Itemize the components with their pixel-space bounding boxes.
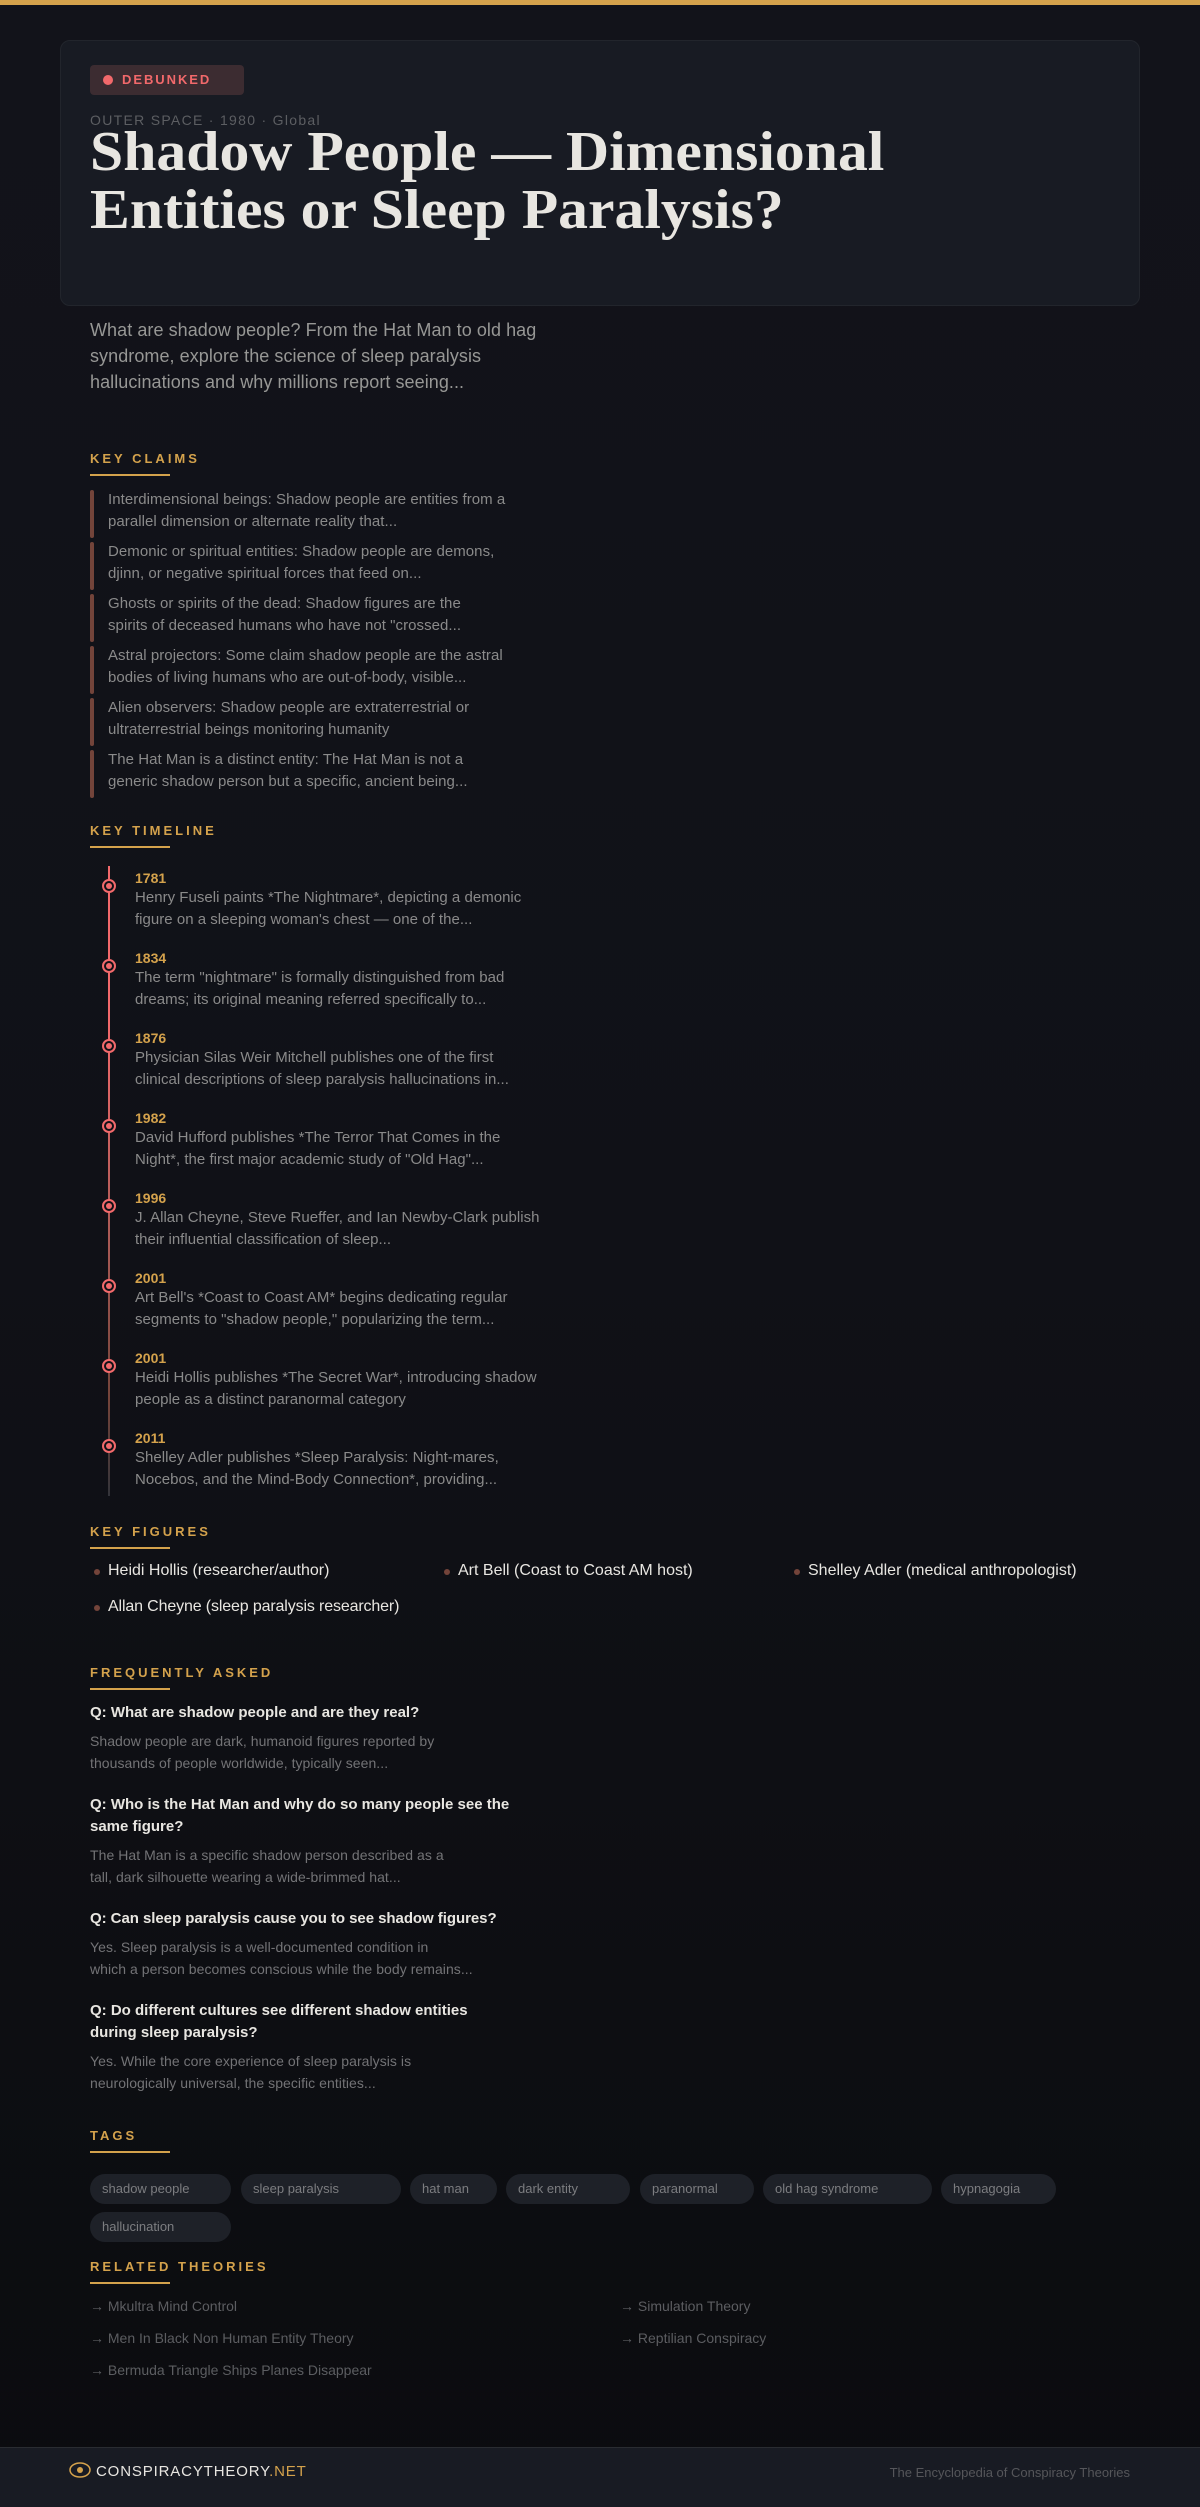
heading: key timeline: KEY TIMELINE: [90, 823, 217, 838]
event 2011: Shelley Adler publishes *Sleep Paralysis: Night-mares,: [135, 1449, 499, 1466]
event 1834: [102, 950, 504, 1008]
tag: shadow people: [102, 2181, 189, 2196]
timeline spine: [108, 866, 110, 1496]
claim 5: [90, 698, 469, 746]
status badge: debunked: [90, 65, 244, 95]
tag: [90, 2212, 231, 2242]
event 2001 Coast to Coast: segments to "shadow people," popularizing the term...: [135, 1311, 494, 1328]
claim 1: [90, 490, 506, 538]
faq 1: thousands of people worldwide, typically seen...: [90, 1755, 388, 1771]
faq 4: Q: Do different cultures see different shadow entities: [90, 2002, 468, 2019]
event 1781: [102, 870, 521, 928]
faq 2: The Hat Man is a specific shadow person described as a: [90, 1847, 444, 1863]
claim 4: Astral projectors: Some claim shadow people are the astral: [108, 647, 503, 664]
panel: header card: [60, 40, 1140, 306]
title: [90, 121, 884, 241]
claim 3: Ghosts or spirits of the dead: Shadow figures are the: [108, 595, 461, 612]
meta line: OUTER SPACE · 1980 · Global: [90, 112, 321, 128]
figure: Allan Cheyne: Allan Cheyne (sleep paralysis researcher): [108, 1598, 399, 1615]
event 1982: David Hufford publishes *The Terror That Comes in the: [135, 1129, 500, 1146]
event 1781: figure on a sleeping woman's chest — one of the...: [135, 911, 472, 928]
claim 6: generic shadow person but a specific, ancient being...: [108, 773, 468, 790]
panel: timeline: 2001: [135, 1270, 166, 1286]
tag: [410, 2174, 497, 2204]
footer tagline: The Encyclopedia of Conspiracy Theories: [890, 2465, 1130, 2480]
claim 6: The Hat Man is a distinct entity: The Hat Man is not a: [108, 751, 463, 768]
tag: sleep paralysis: [253, 2181, 339, 2196]
faq 3: Yes. Sleep paralysis is a well-documented condition in: [90, 1939, 428, 1955]
claim 5: ultraterrestrial beings monitoring humanity: [108, 721, 389, 738]
panel: tags: [90, 2174, 1056, 2242]
claim 1: parallel dimension or alternate reality that...: [108, 513, 397, 530]
faq 4: Yes. While the core experience of sleep paralysis is: [90, 2053, 411, 2069]
claim 6: [90, 750, 468, 798]
panel: key figures: [94, 1562, 1077, 1615]
event 1982: Night*, the first major academic study of "Old Hag"...: [135, 1151, 484, 1168]
event 1876: Physician Silas Weir Mitchell publishes one of the first: [135, 1049, 494, 1066]
summary text: hallucinations and why millions report seeing...: [90, 372, 464, 392]
faq 1: [90, 1704, 434, 1771]
panel: faq: [90, 1704, 509, 2091]
tag: [241, 2174, 401, 2204]
title: Shadow People — Dimensional: [90, 121, 884, 183]
tag: [763, 2174, 932, 2204]
event 1834: The term "nightmare" is formally distinguished from bad: [135, 969, 504, 986]
event 2001 Coast to Coast: [102, 1270, 508, 1328]
panel: timeline: 1834: [135, 950, 166, 966]
faq 2: tall, dark silhouette wearing a wide-brimmed hat...: [90, 1869, 401, 1885]
claim 1: Interdimensional beings: Shadow people are entities from a: [108, 491, 505, 508]
heading: tags: TAGS: [90, 2128, 137, 2143]
figure: Shelley Adler: Shelley Adler (medical anthropologist): [808, 1562, 1077, 1579]
summary text: [90, 320, 536, 392]
heading: frequently asked: FREQUENTLY ASKED: [90, 1665, 273, 1680]
faq 3: [90, 1910, 497, 1977]
tag: [941, 2174, 1056, 2204]
event 1834: dreams; its original meaning referred specifically to...: [135, 991, 486, 1008]
panel: timeline: [102, 866, 539, 1496]
panel: timeline: 2011: [135, 1430, 165, 1446]
tag: [90, 2174, 231, 2204]
tag: hypnagogia: [953, 2181, 1020, 2196]
faq 3: which a person becomes conscious while the body remains...: [90, 1961, 473, 1977]
faq 3: Q: Can sleep paralysis cause you to see shadow figures?: [90, 1910, 497, 1927]
faq 2: Q: Who is the Hat Man and why do so many people see the: [90, 1796, 509, 1813]
claim 4: bodies of living humans who are out-of-body, visible...: [108, 669, 466, 686]
claim 2: Demonic or spiritual entities: Shadow people are demons,: [108, 543, 494, 560]
faq 2: [90, 1796, 509, 1885]
event 2001 Secret War: people as a distinct paranormal category: [135, 1391, 406, 1408]
claim 5: Alien observers: Shadow people are extraterrestrial or: [108, 699, 469, 716]
link: → Men In Black Non Human Entity Theory: [90, 2330, 354, 2346]
faq 4: [90, 2002, 468, 2091]
heading: related theories: RELATED THEORIES: [90, 2259, 268, 2274]
panel: timeline: 1781: [135, 870, 166, 886]
event 1996: J. Allan Cheyne, Steve Rueffer, and Ian Newby-Clark publish: [135, 1209, 539, 1226]
tag: paranormal: [652, 2181, 718, 2196]
tag: [640, 2174, 754, 2204]
claim 2: djinn, or negative spiritual forces that feed on...: [108, 565, 422, 582]
event 1996: [102, 1190, 539, 1248]
event 1781: Henry Fuseli paints *The Nightmare*, depicting a demonic: [135, 889, 521, 906]
tag: dark entity: [518, 2181, 578, 2196]
link: → Simulation Theory: [620, 2298, 750, 2314]
heading: key figures: KEY FIGURES: [90, 1524, 211, 1539]
link: → Bermuda Triangle Ships Planes Disappear: [90, 2362, 372, 2378]
logo wordmark: CONSPIRACYTHEORY.NET: [96, 2463, 307, 2480]
figure: Heidi Hollis: Heidi Hollis (researcher/author): [108, 1562, 329, 1579]
panel: related theories: [90, 2298, 766, 2378]
tag: hat man: [422, 2181, 469, 2196]
tag: hallucination: [102, 2219, 174, 2234]
tag: old hag syndrome: [775, 2181, 878, 2196]
heading: key claims: KEY CLAIMS: [90, 451, 200, 466]
event 2001 Secret War: Heidi Hollis publishes *The Secret War*, introducing shadow: [135, 1369, 537, 1386]
faq 1: Shadow people are dark, humanoid figures reported by: [90, 1733, 434, 1749]
event 1876: clinical descriptions of sleep paralysis hallucinations in...: [135, 1071, 509, 1088]
claim 3: [90, 594, 461, 642]
claim 3: spirits of deceased humans who have not "crossed...: [108, 617, 461, 634]
claim 2: [90, 542, 494, 590]
event 1996: their influential classification of sleep...: [135, 1231, 391, 1248]
panel: timeline: 1876: [135, 1030, 166, 1046]
faq 4: during sleep paralysis?: [90, 2024, 258, 2041]
event 1876: [102, 1030, 509, 1088]
panel: key claims list: [90, 490, 506, 798]
link: → Mkultra Mind Control: [90, 2298, 237, 2314]
event 2011: [102, 1430, 499, 1488]
panel: timeline: 2001: [135, 1350, 166, 1366]
top accent bar: [0, 0, 1200, 5]
icon: status dot: [103, 75, 113, 85]
event 2011: Nocebos, and the Mind-Body Connection*, providing...: [135, 1471, 497, 1488]
claim 4: [90, 646, 503, 694]
summary text: syndrome, explore the science of sleep paralysis: [90, 346, 481, 366]
faq 2: same figure?: [90, 1818, 183, 1835]
panel: timeline: 1982: [135, 1110, 166, 1126]
faq 4: neurologically universal, the specific entities...: [90, 2075, 376, 2091]
summary text: What are shadow people? From the Hat Man to old hag: [90, 320, 536, 340]
footer: [0, 2447, 1200, 2507]
panel: timeline: 1996: [135, 1190, 166, 1206]
event 1982: [102, 1110, 500, 1168]
icon: eye logo: [69, 2462, 91, 2478]
event 2001 Coast to Coast: Art Bell's *Coast to Coast AM* begins dedicating regular: [135, 1289, 508, 1306]
badge label: DEBUNKED: [122, 72, 211, 87]
event 2001 Secret War: [102, 1350, 537, 1408]
title: Entities or Sleep Paralysis?: [90, 179, 784, 241]
link: → Reptilian Conspiracy: [620, 2330, 766, 2346]
figure: Art Bell: Art Bell (Coast to Coast AM host): [458, 1562, 693, 1579]
faq 1: Q: What are shadow people and are they real?: [90, 1704, 419, 1721]
tag: [506, 2174, 630, 2204]
